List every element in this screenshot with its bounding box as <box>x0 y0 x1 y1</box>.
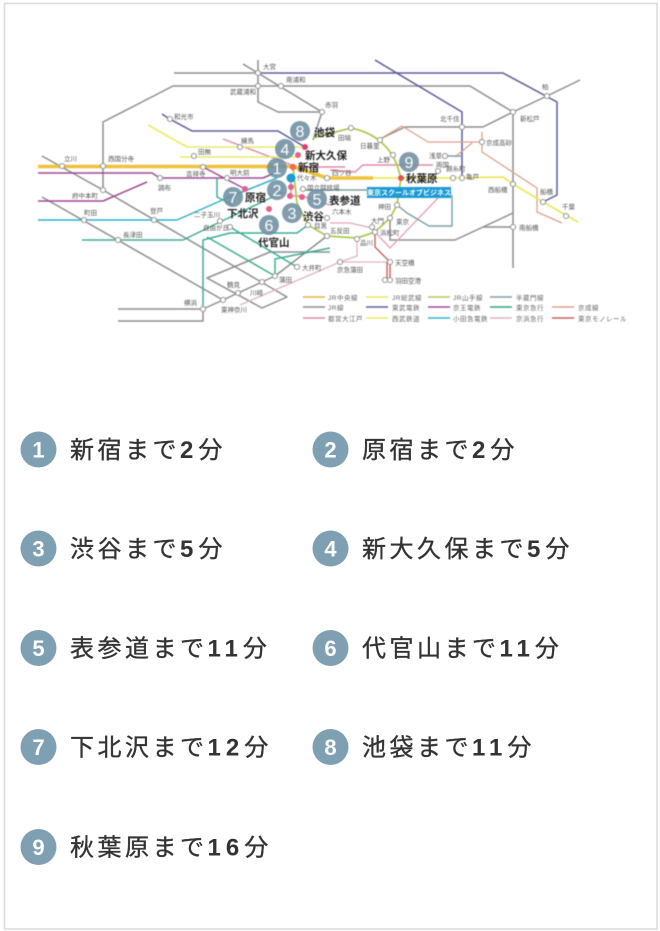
small station labels: 練馬 <box>241 136 254 145</box>
small station labels: 田端 <box>338 133 352 142</box>
small station labels: 調布 <box>158 183 172 192</box>
small station labels: 代々木 <box>297 173 317 182</box>
Tobu line <box>162 60 557 202</box>
small station labels: 南浦和 <box>286 75 306 84</box>
key station names <box>227 126 438 249</box>
item 2 <box>312 432 518 468</box>
small station labels: 六本木 <box>332 207 352 216</box>
item 1: 新宿まで2分 <box>70 437 226 464</box>
Yamanote line <box>293 128 401 238</box>
callout: school name: 東京スクールオブビジネス <box>367 188 451 197</box>
small station labels: 大井町 <box>302 263 322 272</box>
small station labels: 町田 <box>84 209 97 217</box>
small station labels: 日暮里 <box>360 141 380 150</box>
item 5: 表参道まで11分 <box>70 636 270 662</box>
small station labels: 浜松町 <box>380 228 400 237</box>
item 6: 6 <box>324 636 337 661</box>
marker numbers: 2 <box>273 183 282 200</box>
small station labels: 吉祥寺 <box>186 169 206 178</box>
small station labels: 長津田 <box>123 231 142 239</box>
key station names: 原宿 <box>245 191 266 204</box>
small station labels: 天空橋 <box>395 258 415 267</box>
small station labels: 大宮 <box>263 62 276 71</box>
Odakyu line <box>38 178 277 220</box>
small station labels: 赤羽 <box>325 101 338 109</box>
item 9: 9 <box>32 835 45 860</box>
marker numbers <box>229 124 414 235</box>
small station labels: 京成高砂 <box>486 138 512 147</box>
legend: 東京モノレール <box>578 314 627 323</box>
key station names: 秋葉原 <box>406 172 438 185</box>
small station labels <box>64 62 576 314</box>
small station labels: 神田 <box>378 202 391 211</box>
Tokyu lines <box>82 178 330 309</box>
item 2: 2 <box>324 438 337 462</box>
Keikyu and monorail lines <box>240 198 438 305</box>
small station labels: 浅草 <box>429 151 442 160</box>
legend: 東武電鉄 <box>392 303 420 312</box>
legend: JR山手線 <box>453 293 483 302</box>
small station labels: 鶴見 <box>227 280 240 289</box>
Seibu line <box>148 125 303 157</box>
small station labels: 錦糸町 <box>446 164 466 173</box>
callout: school name <box>367 187 451 198</box>
small station labels: 西国分寺 <box>108 154 134 163</box>
legend: 東京急行 <box>516 303 544 312</box>
marker numbers: 4 <box>281 142 290 159</box>
key station names: 代官山 <box>258 236 290 249</box>
small station labels: 自由が丘 <box>203 223 230 232</box>
small station labels: 亀戸 <box>466 172 480 181</box>
small station labels: 千葉 <box>562 202 576 211</box>
item 6 <box>312 630 562 666</box>
marker numbers: 9 <box>405 155 414 172</box>
small station labels: 羽田空港 <box>395 276 422 285</box>
small station labels: 両国 <box>436 161 449 169</box>
white transfer stations <box>59 70 569 312</box>
item 4 <box>312 530 573 566</box>
small station labels: 府中本町 <box>72 191 98 200</box>
small station labels: 和光市 <box>174 112 194 121</box>
small station labels: 北千住 <box>440 114 460 123</box>
route map <box>38 60 580 321</box>
small station labels: 東神奈川 <box>221 305 247 314</box>
legend: JR総武線 <box>392 293 422 302</box>
marker numbers: 6 <box>265 218 274 235</box>
legend: 都営大江戸 <box>328 314 363 323</box>
legend <box>303 293 627 323</box>
small station labels: 川崎 <box>250 288 264 297</box>
item 3 <box>20 530 226 566</box>
item 2: 原宿まで2分 <box>362 437 518 464</box>
item 8 <box>312 729 535 765</box>
small station labels: 目黒 <box>314 222 328 230</box>
key station names: 池袋 <box>314 126 335 139</box>
marker numbers: 7 <box>229 190 238 207</box>
marker numbers: 1 <box>273 161 282 178</box>
key station names: 表参道 <box>329 194 361 207</box>
Oedo line <box>223 139 433 205</box>
legend: JR中央線 <box>328 293 358 302</box>
small station labels: 柏 <box>542 82 548 91</box>
small station labels: 五反田 <box>330 227 350 235</box>
small station labels: 立川 <box>64 154 77 163</box>
item 7 <box>20 729 272 765</box>
small station labels: 横浜 <box>184 298 198 307</box>
small station labels: 四ツ谷 <box>332 168 352 177</box>
legend: 小田急電鉄 <box>453 314 488 323</box>
item 3: 3 <box>32 536 45 562</box>
small station labels: 南船橋 <box>519 223 539 232</box>
marker numbers: 3 <box>288 206 297 223</box>
legend: 半蔵門線 <box>516 293 544 302</box>
highlighted stations <box>242 144 404 212</box>
key station names: 新大久保 <box>305 149 347 162</box>
small station labels: 二子玉川 <box>194 211 220 219</box>
item 8: 8 <box>324 735 337 760</box>
small station labels: 京急蒲田 <box>337 265 363 274</box>
marker numbers: 8 <box>296 124 305 141</box>
small station labels: 登戸 <box>150 206 164 215</box>
legend: 京浜急行 <box>516 314 544 323</box>
legend: 西武鉄道 <box>392 314 420 323</box>
item 1: 1 <box>32 438 45 462</box>
small station labels: 船橋 <box>540 187 554 196</box>
key station names: 渋谷 <box>303 210 324 223</box>
small station labels: 西船橋 <box>488 185 508 194</box>
item 5: 5 <box>32 636 45 661</box>
JR grey lines <box>42 60 580 321</box>
small station labels: 品川 <box>360 239 373 247</box>
item 7: 下北沢まで12分 <box>70 734 272 762</box>
small station labels: 新松戸 <box>520 114 540 123</box>
item 3: 渋谷まで5分 <box>70 536 226 563</box>
small station labels: 田無 <box>198 147 212 156</box>
small station labels: 上野 <box>377 155 390 164</box>
key station names: 新宿 <box>298 161 319 174</box>
Keisei line <box>380 126 562 223</box>
small station labels: 武蔵浦和 <box>230 87 256 96</box>
numbered map markers <box>223 121 419 235</box>
small station labels: 国立競技場 <box>307 183 340 192</box>
item 4: 4 <box>324 536 337 562</box>
item 4: 新大久保まで5分 <box>362 536 573 563</box>
small station labels: 明大前 <box>230 168 250 177</box>
small station labels: 東京 <box>396 217 410 226</box>
key station names: 下北沢 <box>227 207 259 220</box>
item 7: 7 <box>32 735 45 760</box>
legend: 京王電鉄 <box>453 303 481 312</box>
item 5 <box>20 630 270 666</box>
item 9 <box>20 829 272 865</box>
item 6: 代官山まで11分 <box>362 636 562 662</box>
legend: JR線 <box>328 303 344 312</box>
Hanzomon line <box>300 156 462 226</box>
marker numbers: 5 <box>313 192 322 209</box>
small station labels: 大門 <box>371 216 384 225</box>
item 9: 秋葉原まで16分 <box>70 834 272 862</box>
Chuo and Sobu lines <box>38 166 578 222</box>
item 8: 池袋まで11分 <box>362 734 535 762</box>
Keio lines <box>38 167 277 201</box>
legend: 京成線 <box>578 303 599 312</box>
small station labels: 蒲田 <box>279 275 292 284</box>
item 1 <box>20 432 226 468</box>
